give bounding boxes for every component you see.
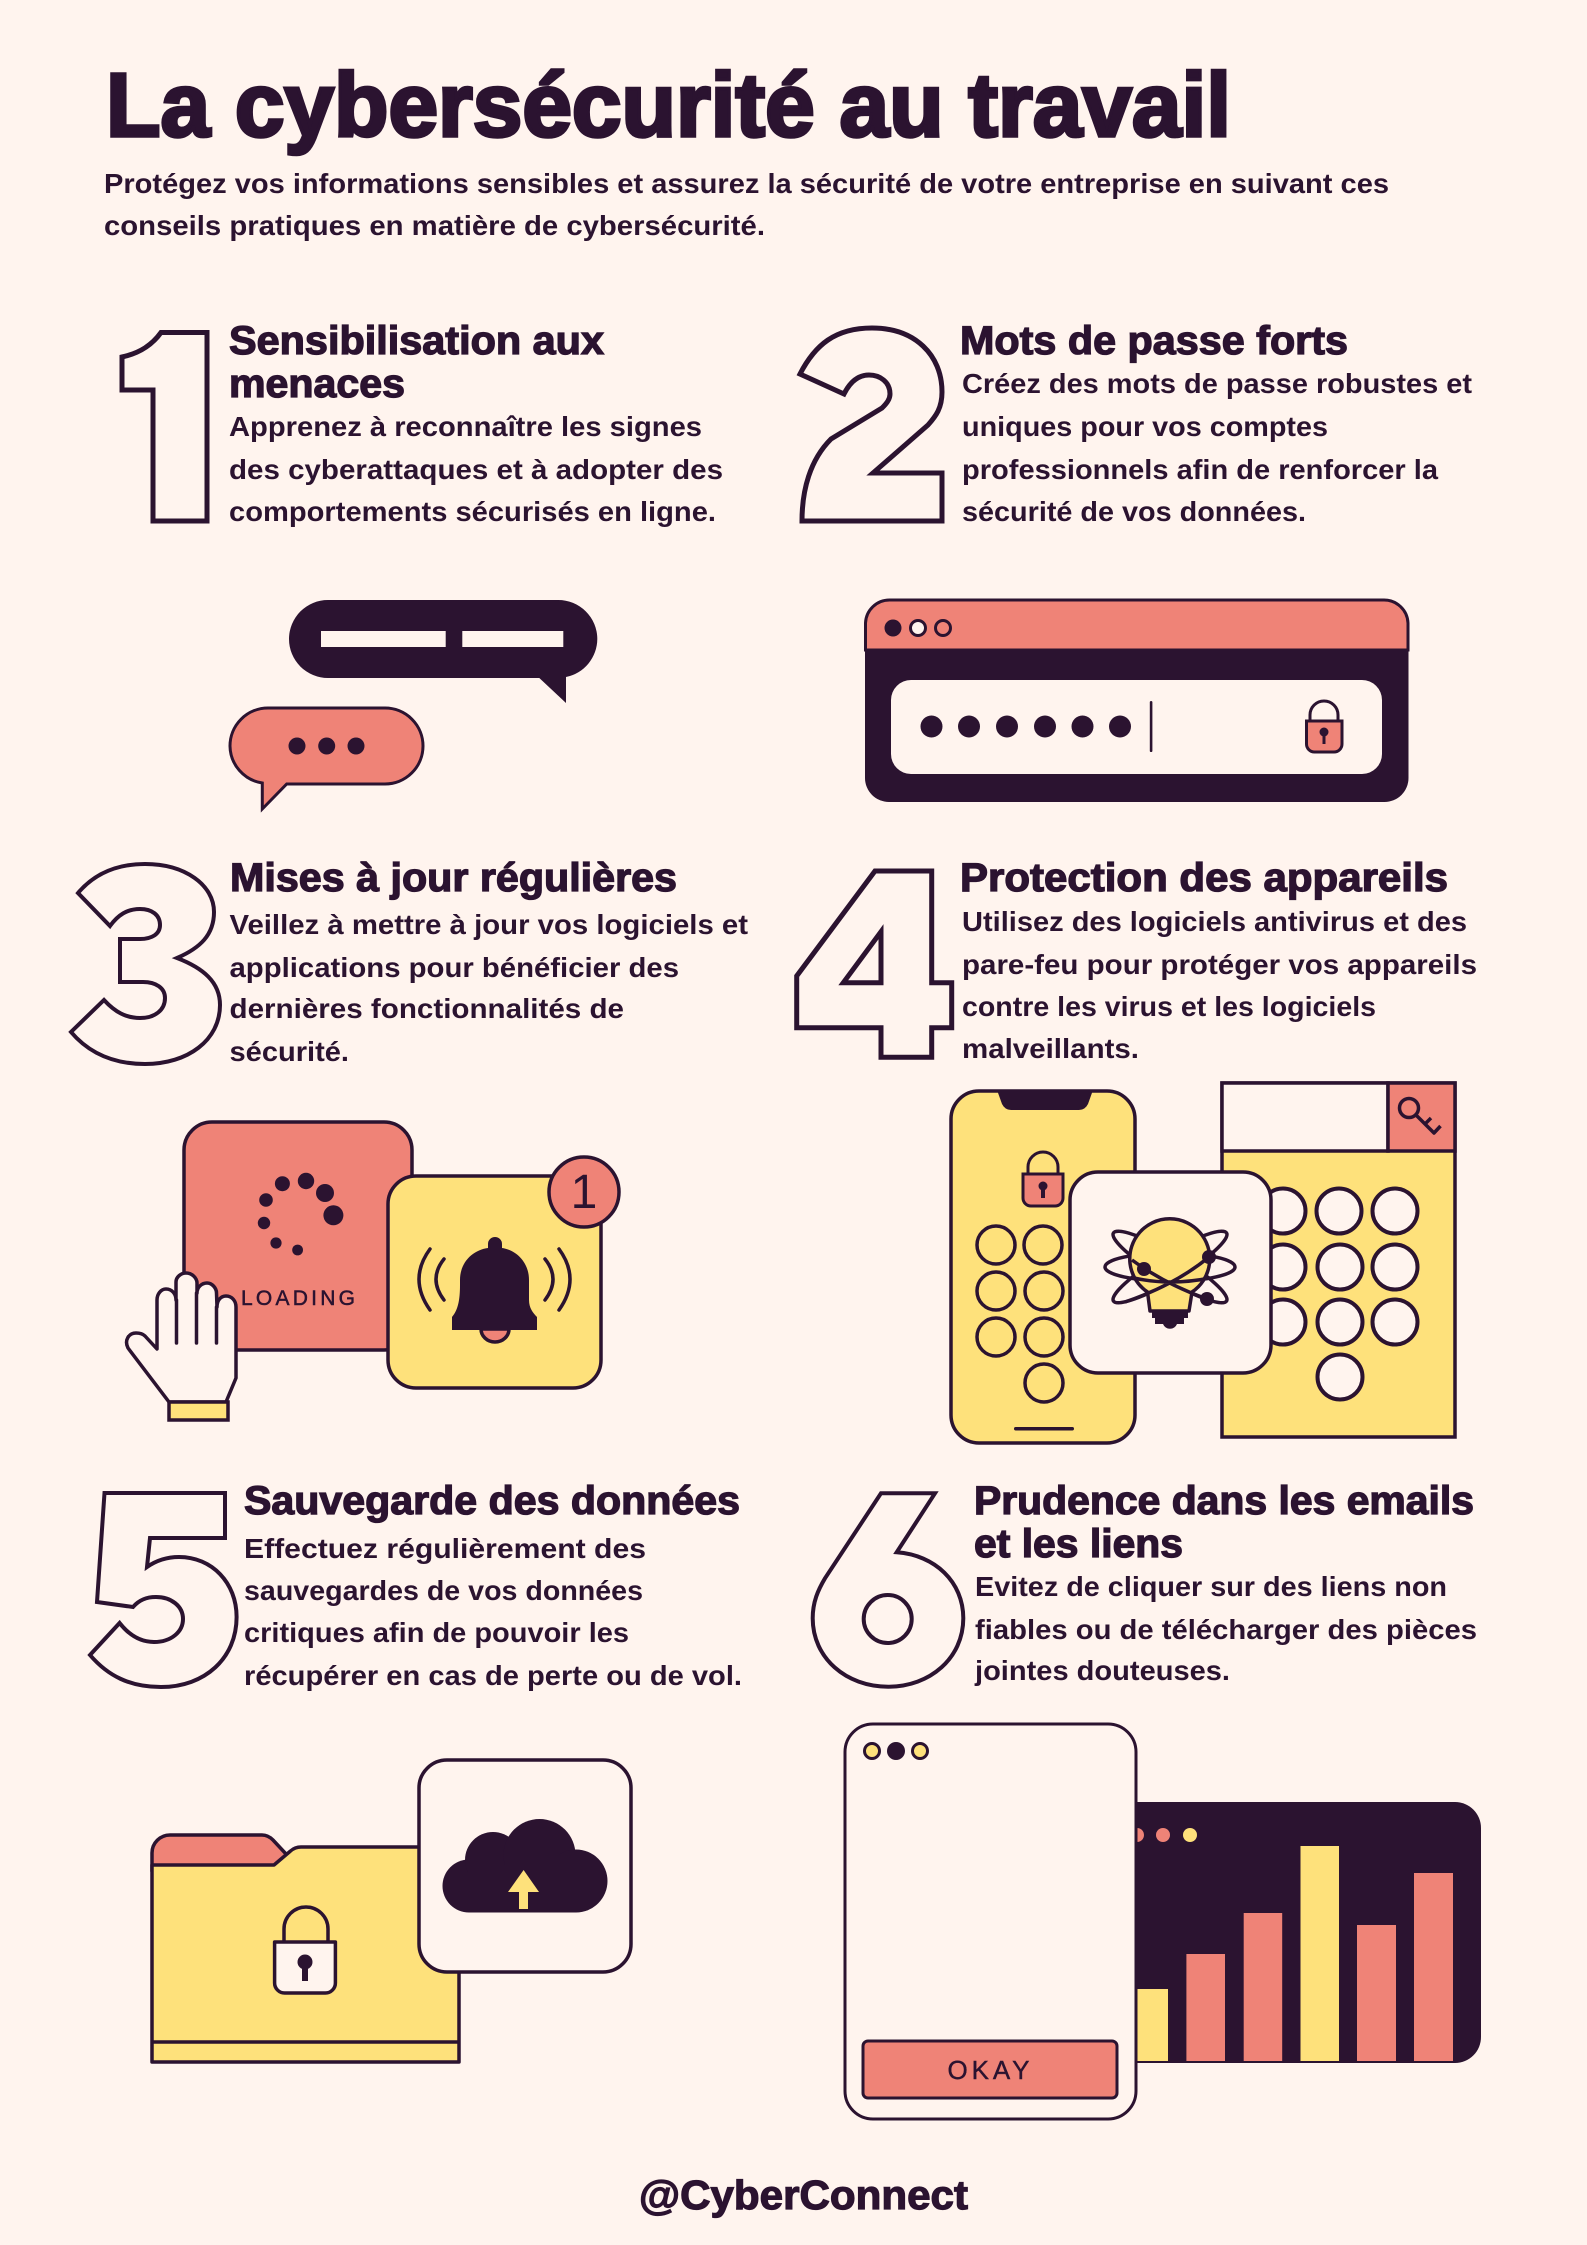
- section 6 text: [974, 1479, 1477, 1686]
- icon: hand cursor: [127, 1273, 236, 1420]
- section 5 text: sauvegardes de vos données: [244, 1575, 643, 1606]
- numeral 4: [797, 871, 952, 1057]
- notification card: [388, 1176, 601, 1388]
- illustration: loading screen and notification: [127, 1122, 619, 1420]
- section 3 text: Veillez à mettre à jour vos logiciels et: [230, 909, 748, 940]
- section 3 text: dernières fonctionnalités de: [230, 993, 624, 1024]
- loading card: [184, 1122, 412, 1350]
- okay button: OKAY: [948, 2055, 1030, 2085]
- password field: [891, 680, 1382, 774]
- dark speech bubble: [289, 600, 597, 703]
- numeral 5: [90, 1493, 237, 1687]
- section 1 text: [229, 319, 723, 527]
- smartphone: [951, 1090, 1135, 1443]
- illustration: locked folder and cloud: [152, 1760, 631, 2062]
- notification badge: 1: [571, 1166, 597, 1219]
- section 4 text: Utilisez des logiciels antivirus et des: [962, 906, 1467, 937]
- section 2 text: [960, 319, 1472, 527]
- dialog window: [845, 1724, 1136, 2119]
- numeral 2: [800, 328, 942, 521]
- window title bar: [866, 600, 1408, 650]
- section 1 text: Apprenez à reconnaître les signes: [229, 411, 702, 442]
- section 6 text: jointes douteuses.: [974, 1655, 1230, 1686]
- section 1 text: comportements sécurisés en ligne.: [229, 496, 716, 527]
- section 2 text: Créez des mots de passe robustes et: [962, 368, 1472, 399]
- section 5 text: récupérer en cas de perte ou de vol.: [244, 1660, 742, 1691]
- section 1 text: Sensibilisation aux: [229, 319, 604, 363]
- section 4 text: [960, 856, 1477, 1064]
- section 3 text: sécurité.: [230, 1036, 349, 1067]
- section 5 text: Effectuez régulièrement des: [244, 1533, 646, 1564]
- section 2 text: Mots de passe forts: [960, 319, 1348, 363]
- cloud upload card: [419, 1760, 631, 1972]
- keypad panel: [1222, 1083, 1455, 1437]
- section 5 text: [244, 1479, 742, 1691]
- illustration: bar chart and dialog: [845, 1724, 1481, 2119]
- section 2 text: uniques pour vos comptes: [962, 411, 1328, 442]
- notification badge: [549, 1157, 619, 1227]
- section 4 text: contre les virus et les logiciels: [962, 991, 1376, 1022]
- section 4 text: malveillants.: [962, 1033, 1139, 1064]
- section 3 text: [230, 856, 748, 1067]
- dark chart panel: [1100, 1802, 1481, 2063]
- numeral 3: [71, 864, 220, 1064]
- illustration: chat bubbles: [230, 600, 597, 809]
- section 3 text: Mises à jour régulières: [230, 856, 677, 900]
- intro text: conseils pratiques en matière de cybersécurité.: [104, 210, 765, 241]
- illustration: device protection: [951, 1083, 1455, 1443]
- section 4 text: pare-feu pour protéger vos appareils: [962, 949, 1477, 980]
- section 2 text: sécurité de vos données.: [962, 496, 1306, 527]
- section 2 text: professionnels afin de renforcer la: [962, 454, 1438, 485]
- section 5 text: critiques afin de pouvoir les: [244, 1617, 629, 1648]
- numeral 6: [813, 1493, 963, 1687]
- illustration: password window: [865, 600, 1408, 802]
- section 4 text: Protection des appareils: [960, 856, 1448, 900]
- folder: [152, 1835, 459, 2062]
- red speech bubble: [230, 708, 423, 809]
- section 5 text: Sauvegarde des données: [244, 1479, 740, 1523]
- section 6 text: Evitez de cliquer sur des liens non: [975, 1571, 1447, 1602]
- light bulb card: [1070, 1172, 1271, 1373]
- okay button: [863, 2041, 1117, 2098]
- numeral 1: [122, 332, 207, 521]
- footer handle: @CyberConnect: [639, 2172, 968, 2218]
- intro text: [104, 168, 1389, 241]
- title: La cybersécurité au travail: [106, 56, 1231, 156]
- section 6 text: fiables ou de télécharger des pièces: [975, 1614, 1477, 1645]
- loading card: LOADING: [241, 1287, 355, 1310]
- section 1 text: des cyberattaques et à adopter des: [229, 454, 723, 485]
- section 1 text: menaces: [229, 362, 405, 406]
- intro text: Protégez vos informations sensibles et assurez la sécurité de votre entreprise en suivant ces: [104, 168, 1389, 199]
- section 3 text: applications pour bénéficier des: [230, 952, 679, 983]
- icon: folder padlock: [275, 1907, 335, 1993]
- section 6 text: et les liens: [974, 1522, 1183, 1566]
- section 6 text: Prudence dans les emails: [974, 1479, 1474, 1523]
- icon: padlock: [1306, 701, 1342, 752]
